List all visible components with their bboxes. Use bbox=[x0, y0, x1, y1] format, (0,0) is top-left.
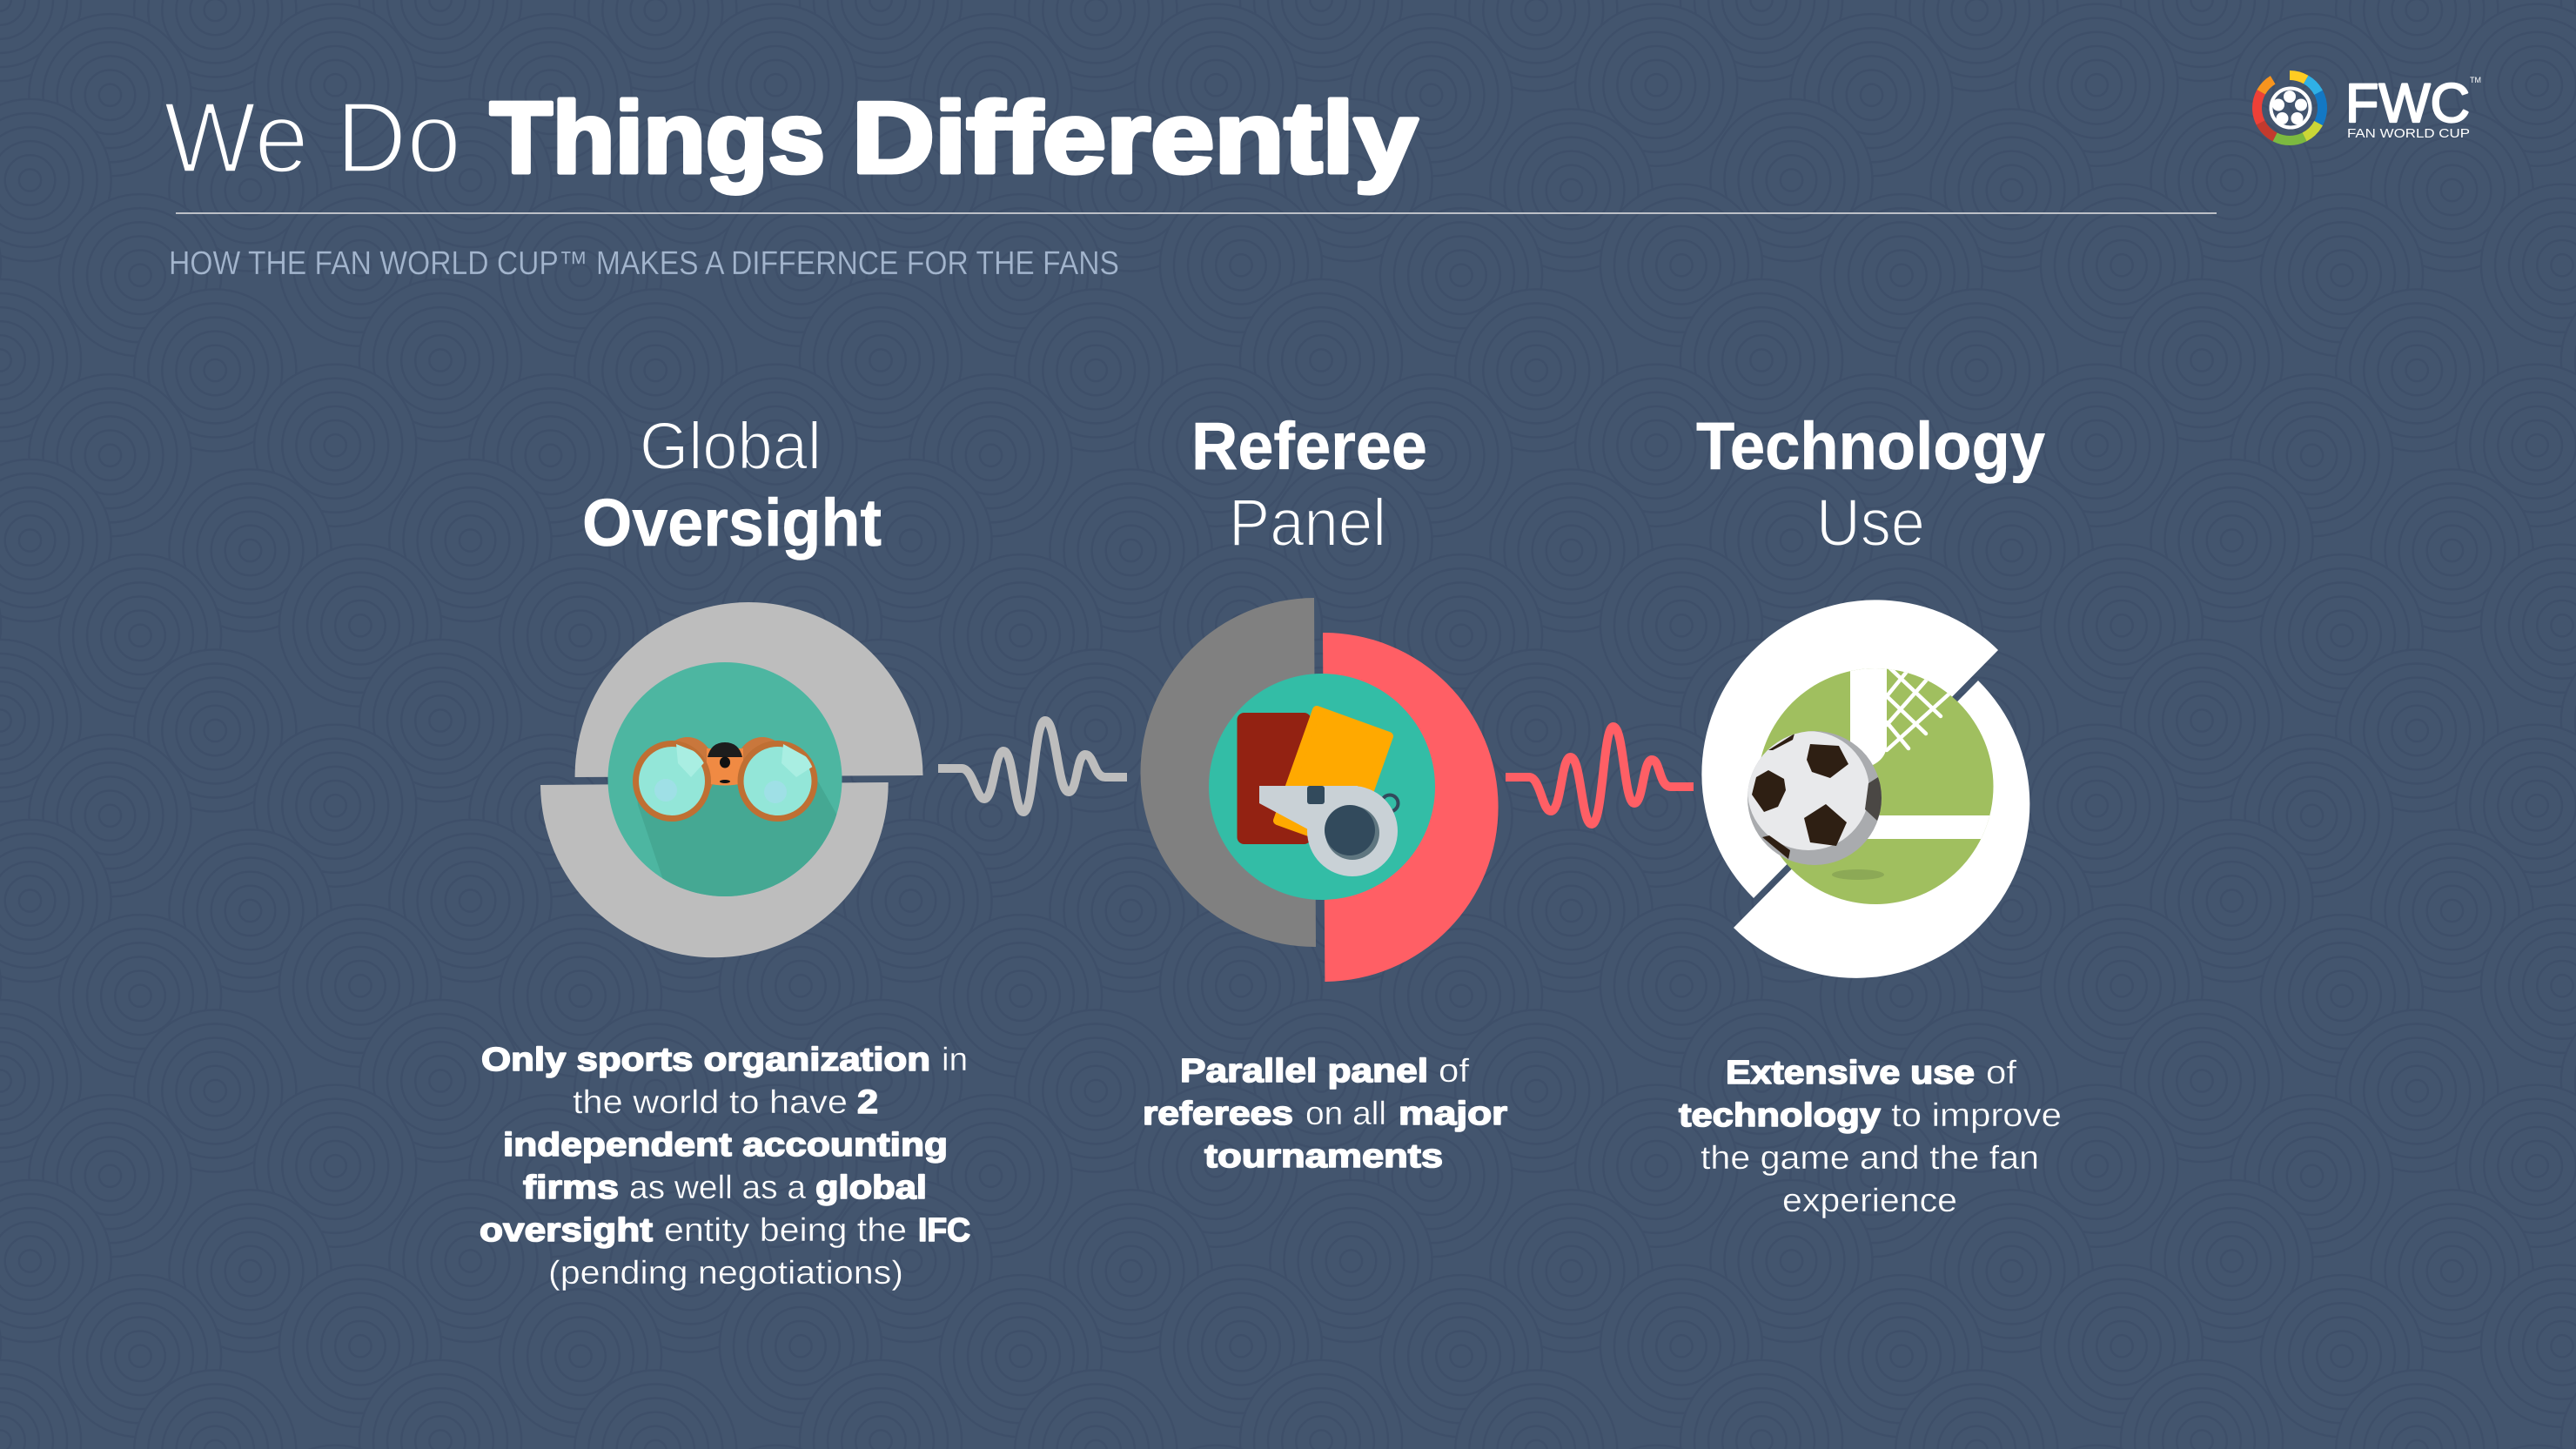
text block: oversight description: entity being the bbox=[664, 1212, 907, 1249]
text block: referee description: referees bbox=[1143, 1096, 1293, 1132]
heading: Global Oversight: Global bbox=[640, 409, 822, 484]
subtitle: HOW THE FAN WORLD CUP™ MAKES A DIFFERNCE FOR THE FANS bbox=[169, 245, 1119, 282]
icon: split gray circle with binoculars bbox=[540, 602, 922, 957]
heading: Technology Use bbox=[1696, 409, 2045, 560]
text block: oversight description: global bbox=[815, 1170, 927, 1206]
title bbox=[164, 81, 1418, 194]
text block: referee description: major bbox=[1399, 1096, 1507, 1132]
text block: referee description: tournaments bbox=[1204, 1138, 1443, 1175]
text block: oversight description: 2 bbox=[857, 1084, 878, 1121]
text block: technology description: of bbox=[1986, 1055, 2016, 1091]
heading: Technology Use: Technology bbox=[1696, 409, 2045, 484]
text block: technology description: to improve bbox=[1891, 1097, 2062, 1134]
text block: technology description: the game and the fan bbox=[1701, 1140, 2039, 1177]
arrow: red wave connector bbox=[1506, 727, 1694, 824]
arrow: gray wave connector bbox=[938, 721, 1127, 812]
title: Things bbox=[490, 81, 825, 194]
title: Differently bbox=[852, 81, 1418, 194]
heading: Referee Panel: Referee bbox=[1191, 409, 1427, 484]
text block: technology description: experience bbox=[1782, 1183, 1957, 1219]
icon: split white circle with pitch and ball bbox=[1701, 600, 2029, 978]
text block: oversight description: as well as a bbox=[629, 1170, 807, 1206]
text block: referee description bbox=[1143, 1053, 1507, 1175]
text block: oversight description: the world to have bbox=[573, 1084, 848, 1121]
logo: FWC Fan World Cup bbox=[2257, 73, 2481, 141]
panel: technology use bbox=[1679, 409, 2062, 1219]
text block: oversight description: oversight bbox=[480, 1212, 653, 1249]
text block: oversight description: IFC bbox=[918, 1212, 970, 1249]
text block: oversight description: in bbox=[942, 1042, 968, 1078]
text block: oversight description: independent accounting bbox=[503, 1127, 948, 1164]
heading: Referee Panel: Panel bbox=[1229, 486, 1386, 560]
text block: technology description bbox=[1679, 1055, 2062, 1219]
text block: oversight description: firms bbox=[523, 1170, 619, 1206]
text block: technology description: Extensive use bbox=[1726, 1055, 1975, 1091]
text block: referee description: on all bbox=[1305, 1096, 1386, 1132]
text block: oversight description: (pending negotiations) bbox=[548, 1255, 903, 1291]
panel: global oversight bbox=[480, 409, 970, 1291]
text block: referee description: of bbox=[1439, 1053, 1469, 1090]
text block: technology description: technology bbox=[1679, 1097, 1881, 1134]
title: We Do bbox=[164, 81, 461, 194]
heading: Technology Use: Use bbox=[1816, 486, 1925, 560]
heading: Global Oversight bbox=[582, 409, 882, 560]
logo: FWC Fan World Cup: FAN WORLD CUP bbox=[2347, 127, 2470, 141]
text block: oversight description bbox=[480, 1042, 970, 1291]
logo: FWC Fan World Cup: TM bbox=[2470, 76, 2481, 85]
icon: split circle with cards and whistle bbox=[1140, 598, 1499, 982]
icon: multicolour ring with ball bbox=[2257, 75, 2322, 141]
panel: referee panel bbox=[1140, 409, 1507, 1175]
text block: oversight description: Only sports organization bbox=[481, 1042, 930, 1078]
heading: Global Oversight: Oversight bbox=[582, 486, 882, 560]
logo: FWC Fan World Cup: FWC bbox=[2345, 73, 2470, 134]
icon: soccer ball bbox=[1748, 731, 1885, 865]
heading: Referee Panel bbox=[1191, 409, 1427, 560]
text block: referee description: Parallel panel bbox=[1180, 1053, 1428, 1090]
